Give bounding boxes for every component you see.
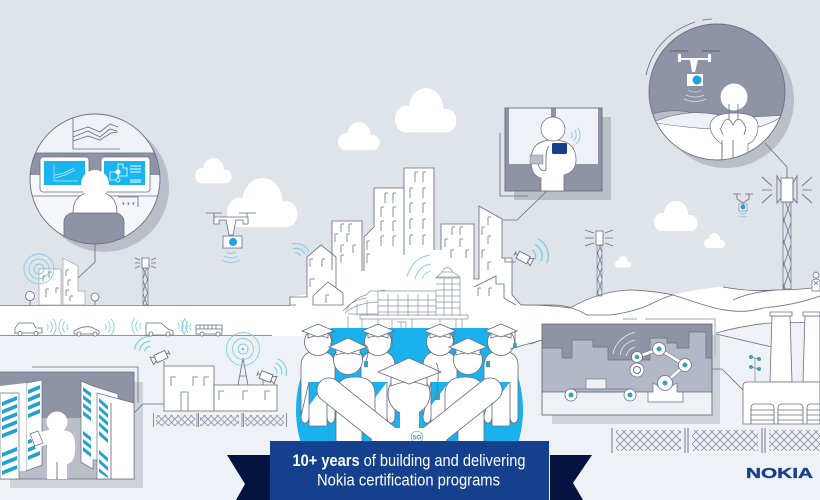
- city wifi and cameras: [289, 237, 552, 266]
- connector: operator to big tower: [765, 143, 787, 178]
- ground and hills: [0, 287, 820, 500]
- banner: [227, 441, 592, 500]
- robot arm: [630, 342, 692, 402]
- ribbon tails: [227, 455, 592, 500]
- small person on hill: [812, 272, 820, 291]
- chimneys: [770, 316, 820, 382]
- panel wifi: [613, 332, 635, 356]
- connector: graduates to factory panel: [510, 340, 542, 349]
- connector: control room to buildings: [78, 244, 95, 278]
- server racks: [0, 380, 134, 479]
- left buildings: [24, 254, 99, 305]
- graduates back row: [301, 324, 518, 426]
- operator: [710, 84, 758, 160]
- screen right: [101, 157, 150, 192]
- office buildings: [132, 332, 289, 411]
- campus wifi: [407, 255, 431, 279]
- person at desk: [73, 170, 117, 213]
- engineer: [30, 412, 75, 479]
- clouds: [195, 88, 725, 267]
- road vehicles: [15, 318, 222, 336]
- hill lines by factory: [530, 322, 820, 347]
- drone: [206, 213, 256, 262]
- foreground houses: [313, 282, 343, 305]
- big tower: [762, 176, 812, 289]
- connector: panel to factory: [712, 369, 743, 390]
- small flying drone: [733, 194, 753, 217]
- skyline in panel: [542, 332, 712, 392]
- screen left: [40, 157, 89, 192]
- chart above screens: [73, 118, 120, 149]
- graduate front with raised arms: [329, 358, 490, 448]
- 5G badge: 5G: [413, 434, 421, 442]
- campus building: [343, 255, 468, 328]
- left lamps: [26, 292, 99, 305]
- fence right: [612, 428, 820, 453]
- lower pale ground: [0, 322, 820, 500]
- engineer figure: [530, 117, 581, 191]
- blue circle behind graduates: [296, 328, 523, 441]
- logo: NOKIA: [746, 466, 814, 482]
- panel: data centre: [0, 367, 143, 488]
- panel: field engineer with tablet: [500, 108, 611, 200]
- factory: [743, 312, 820, 424]
- connector: data centre to office: [134, 404, 164, 413]
- circle: control room: [20, 114, 170, 253]
- graduates middle row: [329, 338, 490, 460]
- banner text: 10+ years of building and delivering: [292, 452, 526, 470]
- office camera 1: [132, 333, 171, 366]
- 5G badge: [411, 431, 423, 448]
- panel: factory robot: [542, 319, 720, 424]
- connector: engineer panel to city: [503, 191, 547, 220]
- conveyor: [565, 379, 636, 401]
- antenna with rings: [226, 332, 260, 385]
- small tower right: [585, 230, 613, 296]
- signal rings: [24, 254, 54, 284]
- city skyline: [290, 168, 531, 330]
- keypad: [118, 197, 138, 207]
- office camera 2: [256, 357, 289, 385]
- circle: drone operator: [646, 19, 794, 170]
- fence left: [154, 413, 286, 427]
- small tower left: [135, 258, 156, 305]
- network icon: [749, 355, 761, 382]
- banner: Nokia certification programs: [317, 472, 500, 490]
- drone in circle: [670, 51, 720, 102]
